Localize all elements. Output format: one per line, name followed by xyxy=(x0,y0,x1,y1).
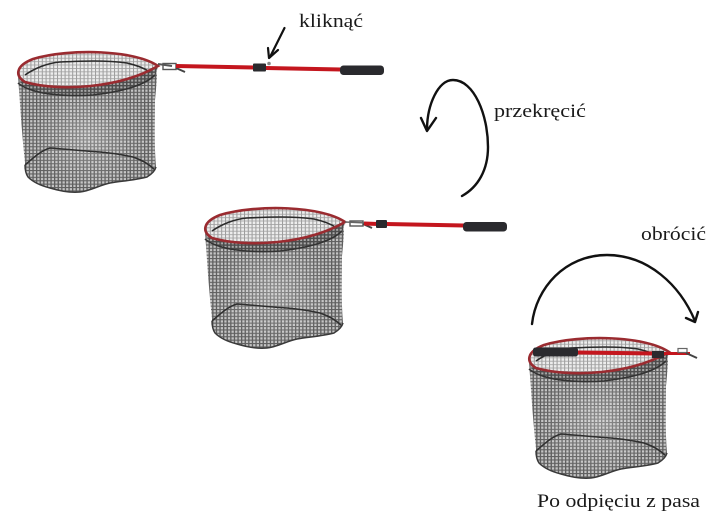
label: obrócić: obrócić xyxy=(641,224,706,245)
net 2: landing net with collapsed handle xyxy=(205,208,507,348)
arrow: twist xyxy=(421,80,488,196)
caption: Po odpięciu z pasa xyxy=(537,491,701,512)
net 3: landing net with handle folded over the hoop xyxy=(529,338,697,478)
label: przekręcić: przekręcić xyxy=(494,101,586,122)
arrow: turn over xyxy=(532,255,698,324)
net 1: landing net with extended handle xyxy=(18,52,384,192)
label: kliknąć: kliknąć xyxy=(299,11,363,32)
arrow: click xyxy=(268,28,284,58)
